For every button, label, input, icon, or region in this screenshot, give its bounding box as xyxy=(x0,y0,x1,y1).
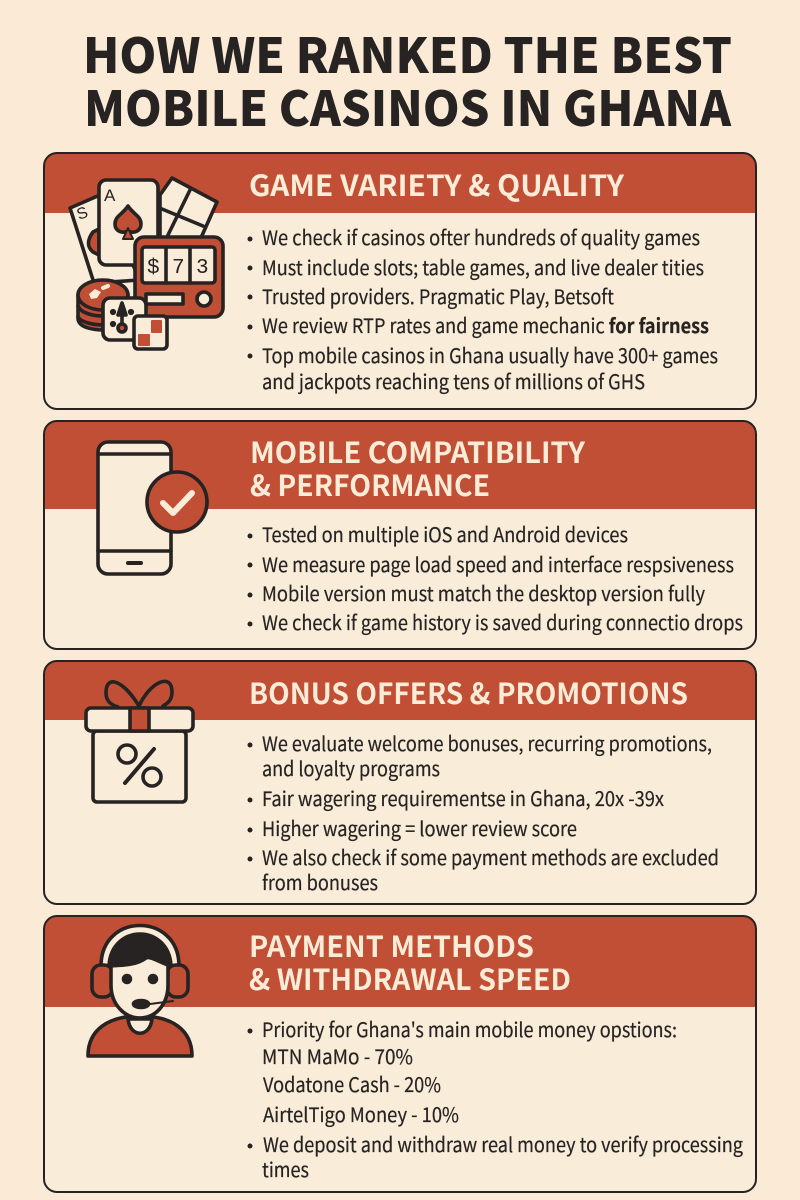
bullet list: bonus offers: Fair wagering requirementse in Ghana, 20x -39x xyxy=(262,783,664,812)
heading: payment methods: & WITHDRAWAL SPEED xyxy=(249,957,571,999)
bullet list: payment methods: Priority for Ghana's main mobile money opstions: xyxy=(262,1014,677,1043)
bullet list: payment methods: We deposit and withdraw real money to verify processing xyxy=(263,1129,743,1158)
icon: gift box with percent sign xyxy=(86,681,193,802)
icon: support agent with headset xyxy=(88,926,192,1056)
bullet list: game variety: Must include slots; table games, and live dealer tities xyxy=(262,252,704,281)
title xyxy=(83,17,732,140)
bullet list: mobile compatibility: Tested on multiple iOS and Android devices xyxy=(262,519,628,548)
icon: cards, slot machine, chips and dice: 3 xyxy=(196,257,209,280)
bullet list: game variety: Top mobile casinos in Ghana usually have 300+ games xyxy=(262,340,718,369)
icon: cards, slot machine, chips and dice xyxy=(70,178,223,349)
bullet list: payment methods: MTN MaMo - 70% xyxy=(262,1041,413,1070)
panel: payment methods and withdrawal speed xyxy=(44,916,756,1192)
bullet list: bonus offers: We evaluate welcome bonuses, recurring promotions, xyxy=(262,728,712,757)
heading: mobile compatibility xyxy=(250,430,586,505)
icon: cards, slot machine, chips and dice: S xyxy=(75,204,90,224)
bullet list: bonus offers: and loyalty programs xyxy=(262,753,440,782)
heading: bonus offers: BONUS OFFERS & PROMOTIONS xyxy=(249,671,688,713)
heading: mobile compatibility: MOBILE COMPATIBILITY xyxy=(250,430,586,472)
bullet list: game variety: We review RTP rates and game mechanic for fairness xyxy=(262,310,709,339)
icon: cards, slot machine, chips and dice: A xyxy=(104,186,116,205)
bullet list: game variety: and jackpots reaching tens of millions of GHS xyxy=(262,366,645,395)
bullet list: bonus offers: from bonuses xyxy=(262,867,378,896)
bullet list: mobile compatibility: We check if game history is saved during connectio drops xyxy=(262,607,743,636)
bullet list: game variety: We check if casinos ofter hundreds of quality games xyxy=(262,222,700,251)
icon: phone with check mark xyxy=(98,442,207,574)
icon: cards, slot machine, chips and dice: 7 xyxy=(172,257,185,280)
bullet list: payment methods: AirtelTigo Money - 10% xyxy=(263,1099,459,1128)
bullet list: bonus offers xyxy=(248,728,719,896)
title: HOW WE RANKED THE BEST xyxy=(83,17,732,87)
bullet list: mobile compatibility xyxy=(248,519,743,636)
title: MOBILE CASINOS IN GHANA xyxy=(84,70,732,140)
bullet list: game variety xyxy=(248,222,718,395)
heading: mobile compatibility: & PERFORMANCE xyxy=(250,463,490,505)
bullet list: game variety: Trusted providers. Pragmatic Play, Betsoft xyxy=(262,281,614,310)
bullet list: mobile compatibility: We measure page load speed and interface respsiveness xyxy=(262,549,734,578)
icon: cards, slot machine, chips and dice: $ xyxy=(147,257,160,280)
bullet list: payment methods xyxy=(248,1014,743,1183)
heading: payment methods xyxy=(249,924,571,999)
panel: game variety and quality xyxy=(44,153,756,409)
panel: mobile compatibility and performance xyxy=(44,421,756,649)
heading: payment methods: PAYMENT METHODS xyxy=(249,924,534,966)
bullet list: bonus offers: Higher wagering = lower review score xyxy=(262,813,577,842)
bullet list: bonus offers: We also check if some payment methods are excluded xyxy=(262,842,719,871)
bullet list: payment methods: Vodatone Cash - 20% xyxy=(263,1069,441,1098)
heading: game variety: GAME VARIETY & QUALITY xyxy=(249,163,625,205)
bullet list: mobile compatibility: Mobile version must match the desktop version fully xyxy=(262,578,706,607)
panel: bonus offers and promotions xyxy=(44,661,756,904)
bullet list: payment methods: times xyxy=(262,1154,309,1183)
